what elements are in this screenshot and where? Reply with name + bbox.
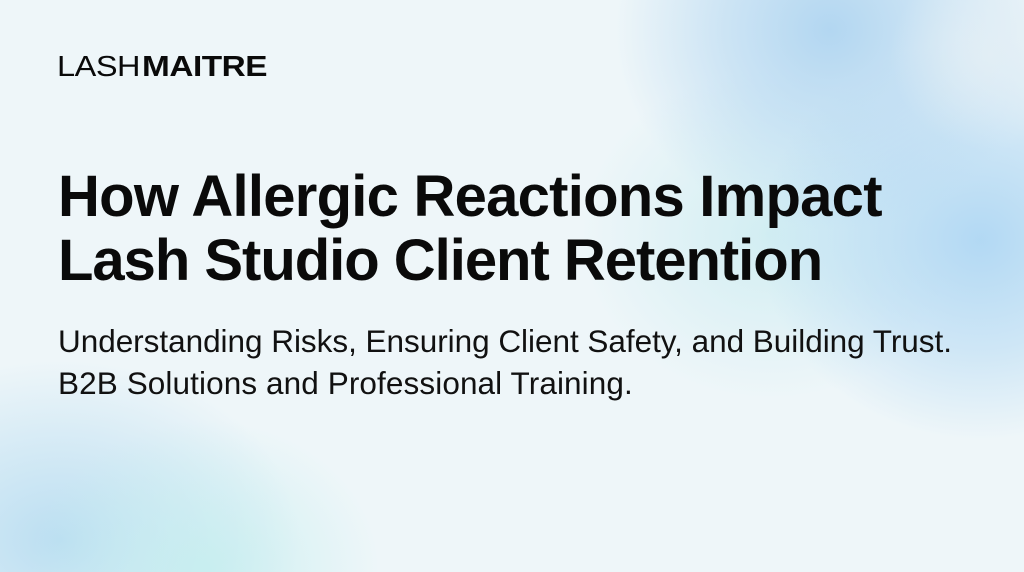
subtitle: B2B Solutions and Professional Training. — [58, 365, 633, 401]
subtitle — [58, 323, 952, 401]
subtitle: Understanding Risks, Ensuring Client Safety, and Building Trust. — [58, 323, 952, 359]
logo: LashMaitre wordmark: MAITRE — [142, 51, 267, 83]
title: How Allergic Reactions Impact — [58, 164, 882, 229]
title: Lash Studio Client Retention — [58, 228, 822, 293]
title — [58, 164, 882, 293]
logo: LashMaitre wordmark: LASH — [57, 51, 140, 83]
logo: LashMaitre wordmark — [57, 51, 267, 83]
